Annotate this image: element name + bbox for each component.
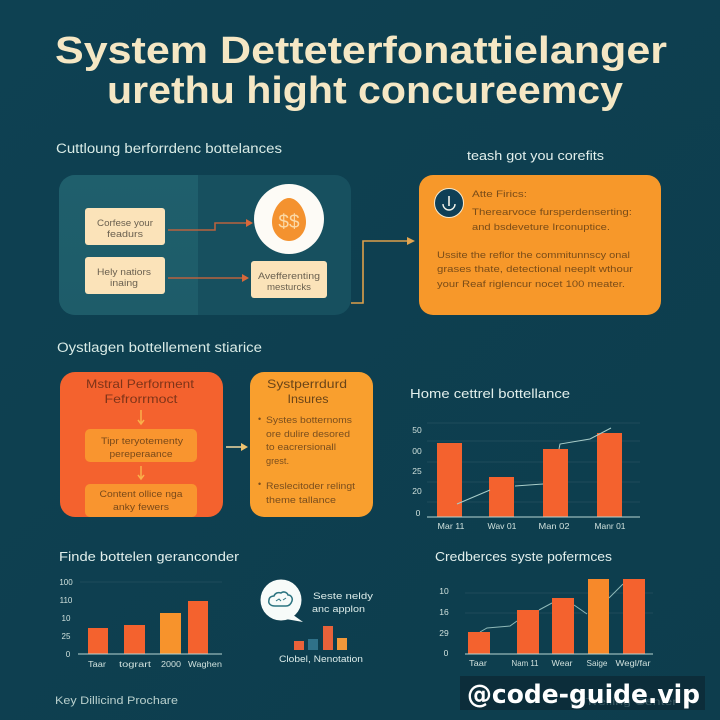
watermark: 5, Trelling Center [570,697,678,708]
y axis labels: 00 [412,446,422,456]
y axis labels: 0 [416,508,421,518]
title [55,30,667,112]
panel: performance flow [60,372,223,517]
bullet list: ore dulire desored [266,429,350,439]
y axis labels: 0 [444,648,449,658]
panel title [267,377,347,406]
arrow: nations to resources [168,274,249,282]
x axis labels: Taar [469,658,487,668]
y axis labels: 25 [62,632,71,641]
callout text: Ussite the reflor the commitunnscy onal [437,250,630,261]
callout text: Atte Firics: [472,189,527,200]
box: nations: Hely natiors [97,267,152,277]
title: System Detteterfonattielanger [55,30,667,72]
x axis labels: Nam 11 [512,658,539,668]
chart: bottleneck generation [59,549,240,669]
callout text: your Reaf riglencur nocet 100 meater. [437,279,625,290]
bullet list: • [258,479,261,489]
bullet list [258,414,356,505]
box: nations: inaing [110,278,138,288]
y axis labels [59,578,73,659]
panel title: Insures [288,392,328,406]
x axis labels: Man 02 [538,521,570,531]
box: readers [85,208,165,245]
panel: flow diagram [59,175,351,315]
text: bubble caption [312,591,373,615]
chart title: Credberces syste pofermces [435,549,613,564]
footer text: Key Dillicind Prochare [55,695,178,707]
box: tier: Tipr teryotementy [101,436,184,446]
x axis labels: 2000 [161,660,182,669]
bullet list: theme tallance [266,495,336,505]
box: tier [85,429,197,462]
y axis labels [439,586,449,658]
bullet list: grest. [266,456,289,466]
box: resources: Avefferenting [258,271,320,281]
box: resources [251,261,327,298]
panel title: Systperrdurd [267,377,347,391]
y axis labels: 110 [60,596,73,605]
x axis labels [438,521,626,531]
x axis labels: Wegl/far [616,658,651,668]
box: content: anky fewers [113,502,170,512]
x axis labels: Wear [552,658,573,668]
bullet list: to eacrersionall [266,442,336,452]
y axis labels: 50 [412,425,422,435]
arrow: readers to egg [168,219,253,230]
x axis labels: Waghen [188,660,222,669]
heading: bottlenecks: Cuttloung berforrdenc bottelances [56,141,282,156]
arrow: panel connector [351,237,415,303]
bullet list: Systes botternoms [266,415,353,425]
watermark: @code-guide.vip [467,680,700,710]
chart: system performance [435,549,653,668]
heading: benefits: teash got you corefits [467,148,605,163]
mini chart label: Clobel, Nenotation [279,654,363,664]
icon: egg with dollars [254,184,324,254]
chart title: Finde bottelen geranconder [59,549,240,564]
arrow: flow to insures [226,443,248,451]
x axis labels: Saige [586,658,608,668]
callout text [437,189,633,290]
arrow: down two [138,466,144,479]
bars [437,433,622,517]
x axis labels: Wav 01 [488,521,517,531]
y axis labels: 100 [59,578,73,587]
box: content: Content ollice nga [100,489,182,499]
chart title: Home cettrel bottellance [410,386,570,401]
chart: mini bars [279,626,363,664]
box: tier: pereperaance [110,449,172,459]
x axis labels: Mar 11 [438,521,465,531]
callout text: and bsdeveture Irconuptice. [472,222,610,233]
text: bubble caption: Seste neldy [313,591,373,602]
box: resources: mesturcks [267,282,312,292]
chart: central bottleneck [410,386,640,531]
y axis labels: 0 [66,650,71,659]
y axis labels: 10 [439,586,449,596]
bullet list: Reslecitoder relingt [266,481,356,491]
arrow: down one [138,410,144,424]
panel: insures [250,372,373,517]
heading: strategy: Oystlagen bottellement stiarice [57,340,262,355]
panel: benefits callout [419,175,661,315]
x axis labels [88,660,222,669]
box: nations [85,257,165,294]
panel title: Mstral Performent [86,377,195,391]
bars [88,601,208,654]
panel title: Fefrorrmoct [104,392,178,406]
x axis labels: togrart [119,660,152,669]
text: bubble caption: anc applon [312,604,365,615]
y axis labels [412,425,422,518]
title: urethu hight concureemcy [107,70,623,112]
box: readers: feadurs [107,229,144,239]
y axis labels: 29 [439,628,449,638]
bars [468,579,645,654]
y axis labels: 16 [439,607,449,617]
y axis labels: 20 [412,486,422,496]
icon: speech bubble with cloud [260,580,303,622]
y axis labels: 10 [62,614,71,623]
icon: download badge [434,188,464,218]
x axis labels: Taar [88,660,106,669]
callout text: grases thate, detectional neeplt wthour [437,264,633,275]
icon: egg with dollars: $$ [278,212,300,233]
box: readers: Corfese your [97,218,153,228]
y axis labels: 25 [412,466,422,476]
panel title [86,377,195,406]
box: content [85,484,197,517]
x axis labels: Manr 01 [594,521,626,531]
bullet list: • [258,414,261,424]
callout text: Therearvoce fursperdenserting: [472,207,632,218]
x axis labels [469,658,651,668]
